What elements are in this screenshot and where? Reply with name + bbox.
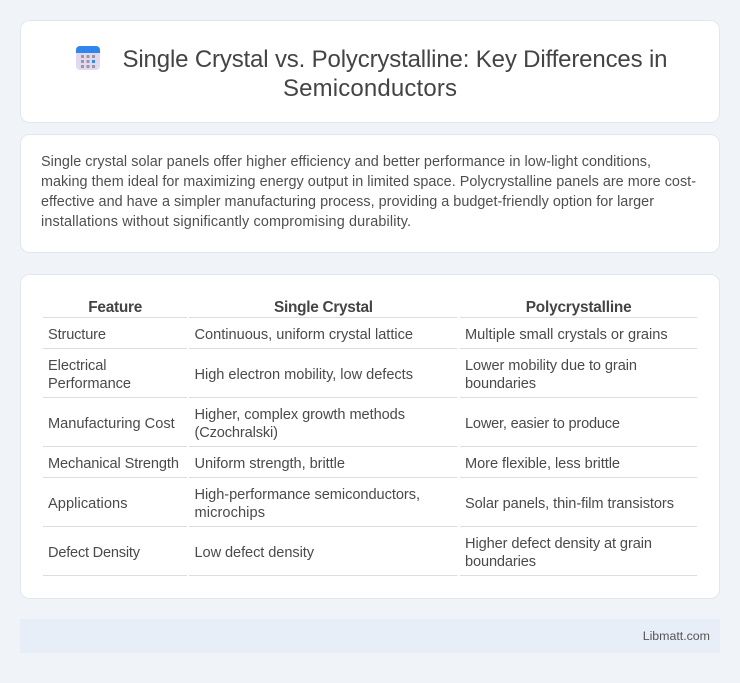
description text: Single crystal solar panels offer higher efficiency and better performance in low-light conditions, xyxy=(41,154,651,170)
table header: Single Crystal xyxy=(274,299,373,316)
row: manufacturing cost: Manufacturing Cost xyxy=(48,416,175,432)
description text: installations without significantly compromising durability. xyxy=(41,214,411,230)
description text: making them ideal for maximizing energy output in limited space. Polycrystalline panels are more cost- xyxy=(41,174,696,190)
description text xyxy=(41,154,696,230)
row: manufacturing cost: Higher, complex growth methods xyxy=(194,407,405,423)
row: defect density: boundaries xyxy=(465,554,536,570)
row: applications: microchips xyxy=(194,505,265,521)
row: applications: Solar panels, thin-film transistors xyxy=(465,496,674,512)
footer xyxy=(20,619,720,653)
row: electrical performance: Electrical xyxy=(48,358,106,374)
title xyxy=(122,46,668,102)
row: electrical performance: High electron mobility, low defects xyxy=(194,367,413,383)
row: defect density: Higher defect density at grain xyxy=(465,536,652,552)
table header: Polycrystalline xyxy=(526,299,632,316)
row: mechanical strength: More flexible, less brittle xyxy=(465,456,620,472)
row: defect density xyxy=(48,536,652,570)
row: structure: Structure xyxy=(48,327,106,343)
row: electrical performance: Lower mobility due to grain xyxy=(465,358,637,374)
panel: header xyxy=(20,20,720,122)
panel: comparison table xyxy=(20,274,720,598)
row: defect density: Defect Density xyxy=(48,545,141,561)
title: Single Crystal vs. Polycrystalline: Key Differences in xyxy=(122,46,668,73)
footer: Libmatt.com xyxy=(643,629,710,643)
row: mechanical strength xyxy=(48,456,620,472)
row: manufacturing cost: (Czochralski) xyxy=(194,425,278,441)
row: applications: High-performance semiconductors, xyxy=(194,487,420,503)
row: electrical performance: boundaries xyxy=(465,376,536,392)
row: applications: Applications xyxy=(48,496,128,512)
icon: calendar xyxy=(76,46,100,70)
row: mechanical strength: Mechanical Strength xyxy=(48,456,179,472)
table header: Feature xyxy=(88,299,143,316)
row: structure xyxy=(48,327,668,343)
title: Semiconductors xyxy=(283,75,457,102)
row: structure: Continuous, uniform crystal lattice xyxy=(194,327,413,343)
description text: effective and have a simpler manufacturing process, providing a budget-friendly option for larger xyxy=(41,194,654,210)
row: applications xyxy=(48,487,674,521)
row: electrical performance xyxy=(48,358,637,392)
row: mechanical strength: Uniform strength, brittle xyxy=(194,456,345,472)
panel: description xyxy=(20,134,720,252)
row: manufacturing cost: Lower, easier to produce xyxy=(465,416,620,432)
table header xyxy=(88,299,632,316)
row: structure: Multiple small crystals or grains xyxy=(465,327,668,343)
row: electrical performance: Performance xyxy=(48,376,131,392)
row: manufacturing cost xyxy=(48,407,620,441)
row: defect density: Low defect density xyxy=(194,545,315,561)
